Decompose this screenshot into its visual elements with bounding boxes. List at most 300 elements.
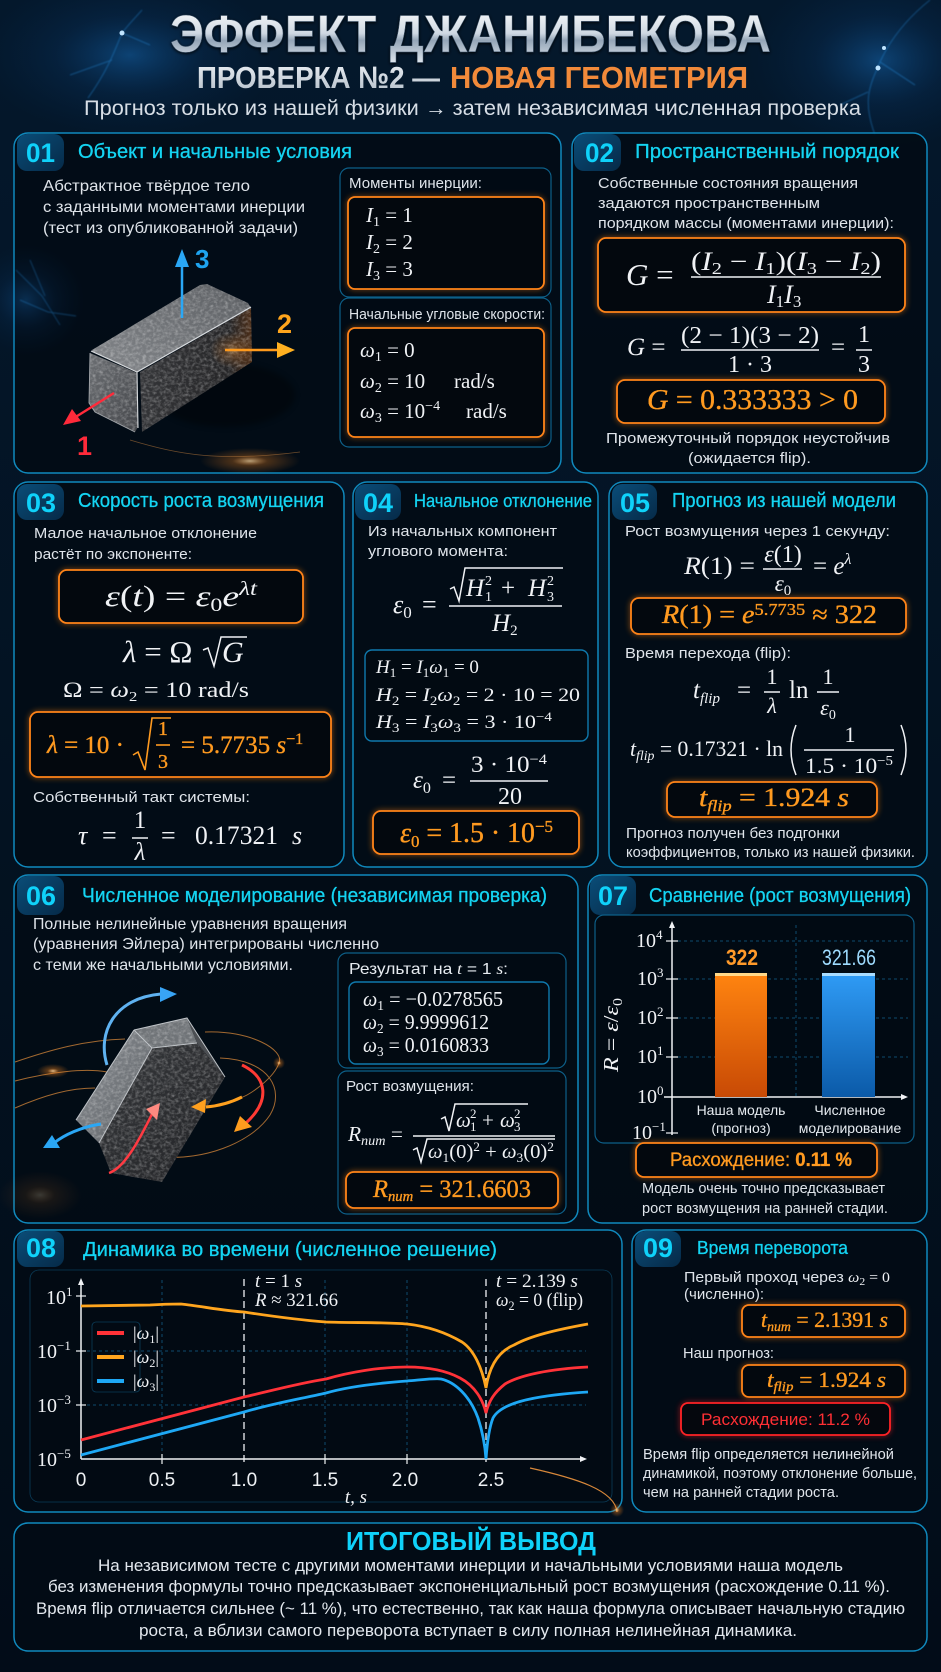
subpanel: perturbation growth: (0) [449, 1141, 473, 1163]
formula: G calculation: 1 [858, 322, 870, 348]
annotation: flip: = 0 (flip) [515, 1290, 583, 1311]
box: angular momentum components: 1 [390, 665, 396, 680]
annotation: flip: t = 2.139 s [496, 1271, 578, 1292]
result: predicted flip time: t [767, 1367, 774, 1392]
x axis labels: (прогноз) [711, 1120, 771, 1136]
formula: R(1): = e [813, 553, 844, 580]
subpanel: result at t=1: 2 [377, 1022, 384, 1037]
label: first pass: Первый проход через ω [684, 1269, 859, 1286]
formula: G calculation: 1 · 3 [728, 352, 772, 378]
y axis labels: 10 [632, 1122, 652, 1144]
subpanel: perturbation growth: 2 [470, 1106, 476, 1121]
box: angular momentum components: = 0 [449, 657, 479, 678]
x axis title: t, s [345, 1487, 367, 1508]
formula: t flip: λ [766, 693, 777, 718]
formula: tau: τ [78, 821, 89, 850]
y axis title: 0 [611, 998, 626, 1006]
badge 08: 08 [26, 1233, 56, 1263]
bar: numerical [822, 945, 876, 1097]
formula: epsilon0 calculation [413, 752, 548, 810]
note 02: (ожидается flip). [688, 450, 811, 467]
heading 09: Время переворота [697, 1238, 849, 1258]
badge 01: 01 [26, 138, 55, 168]
description 02: Собственные состояния вращения [598, 175, 858, 192]
label: first pass: (численно): [684, 1286, 764, 1303]
conclusion heading: ИТОГОВЫЙ ВЫВОД [346, 1526, 596, 1556]
result: numerical flip time: = 2.1391 [791, 1307, 880, 1332]
formula: t flip calculation: = 0.17321 · ln [654, 736, 783, 761]
subpanel: perturbation growth: + [480, 1141, 502, 1163]
box: angular momentum components: 1 [443, 665, 449, 680]
result: lambda value: 3 [158, 751, 168, 773]
y axis labels: 10 [637, 1086, 657, 1108]
panel 03: perturbation growth rate [14, 482, 344, 867]
description 02: задаются пространственным [598, 195, 820, 212]
note 05: Прогноз получен без подгонки [626, 826, 840, 842]
tagline: Прогноз только из нашей физики → затем независимая численная проверка [84, 97, 861, 120]
x tick labels: 2.0 [392, 1470, 418, 1491]
x tick labels: 2.5 [478, 1470, 504, 1491]
heading 06: Численное моделирование (независимая проверка) [82, 885, 547, 907]
result: t flip value: s [837, 783, 849, 812]
subpanel: moments of inertia: Моменты инерции: [349, 175, 482, 192]
box: angular momentum components: H [375, 685, 393, 706]
result: predicted flip time: s [877, 1367, 886, 1392]
subpanel: moments of inertia: I [365, 257, 374, 281]
formula: epsilon0 from H: 2 [547, 574, 554, 589]
subpanel: initial angular velocities: Начальные угловые скорости: [349, 306, 545, 323]
subpanel: moments of inertia: = 2 [380, 230, 413, 254]
label: flip time: Время перехода (flip): [625, 645, 791, 662]
formula: tau: = [161, 821, 176, 850]
formula: epsilon0 calculation: −4 [530, 752, 548, 768]
formula: tau [78, 807, 302, 866]
note 07: Модель очень точно предсказывает [642, 1180, 885, 1197]
subpanel: initial angular velocities: 3 [375, 411, 382, 426]
description 01 [43, 178, 305, 237]
subpanel: perturbation growth: ω [428, 1141, 443, 1163]
formula: tau: 1 [134, 807, 146, 834]
subpanel: perturbation growth: ω [502, 1141, 517, 1163]
description 06: Полные нелинейные уравнения вращения [33, 916, 347, 933]
legend: |ω [133, 1323, 149, 1343]
formula: t flip calculation: 1 [844, 722, 856, 747]
subpanel: moments of inertia: 3 [373, 269, 380, 284]
subpanel: result at t=1: ω [363, 987, 377, 1011]
formula: R(1): λ [843, 551, 851, 568]
formula: epsilon0 from H: + [501, 575, 515, 602]
result: discrepancy [636, 1143, 877, 1177]
result: R(1) value [631, 598, 906, 634]
title: ЭФФЕКТ ДЖАНИБЕКОВА [170, 5, 771, 64]
badge 07 [590, 876, 636, 915]
subtitle: НОВАЯ ГЕОМЕТРИЯ [450, 60, 748, 95]
subpanel: result at t=1: = −0.0278565 [384, 987, 503, 1011]
note 09: динамикой, поэтому отклонение больше, [643, 1466, 917, 1482]
subpanel: perturbation growth: R [372, 1176, 388, 1203]
box: angular momentum components: −4 [536, 709, 553, 724]
arrow: blue arc [104, 987, 177, 1065]
y tick labels: −5 [57, 1446, 71, 1461]
result: epsilon0 value: = 1.5 · 10 [419, 818, 535, 849]
box: angular momentum components: I [422, 712, 432, 733]
subpanel: perturbation growth: (0) [523, 1141, 547, 1163]
arrow: red on face [109, 1103, 160, 1173]
subpanel: initial angular velocities: ω [360, 399, 375, 423]
formula: t flip calculation: −5 [877, 754, 893, 769]
description 01: с заданными моментами инерции [43, 199, 305, 216]
arrow: red arc [234, 1065, 263, 1132]
legend: |ω [133, 1347, 149, 1367]
y tick labels [37, 1284, 72, 1471]
heading 07: Сравнение (рост возмущения) [649, 885, 911, 907]
panel 08: dynamics over time [14, 1230, 624, 1517]
heading 03: Скорость роста возмущения [78, 490, 324, 512]
formula: tau: = [102, 821, 117, 850]
subpanel: result at t=1: ω [363, 1010, 377, 1034]
arrow: axis 2 [225, 309, 295, 358]
subpanel: perturbation growth: Рост возмущения: [346, 1078, 474, 1095]
subpanel: perturbation growth: 2 [473, 1139, 480, 1154]
box: angular momentum components: 3 [430, 720, 438, 735]
y axis title: R = ε/ε [599, 1007, 623, 1072]
formula: t flip: ln [789, 677, 809, 704]
note 09 [643, 1447, 917, 1501]
formula: epsilon0 from H: 2 [510, 623, 518, 639]
subpanel: perturbation growth: 1 [443, 1150, 449, 1165]
annotation: flip: ω [496, 1290, 508, 1311]
result: predicted flip time [742, 1365, 905, 1397]
arrow: axis 1: 1 [77, 431, 92, 461]
badge 09: 09 [643, 1233, 673, 1263]
y tick labels: 10 [37, 1449, 57, 1471]
subpanel: result at t=1 [338, 953, 566, 1068]
formula: epsilon0 from H: ε [393, 590, 404, 619]
formula: epsilon0 from H: = [422, 590, 437, 619]
bar: our model [715, 945, 767, 1097]
badge 01 [17, 134, 64, 171]
result: t flip value: t [699, 783, 708, 812]
subpanel: initial angular velocities: −4 [425, 399, 440, 414]
bar: our model: 322 [726, 945, 758, 970]
result: numerical flip time: t [761, 1307, 768, 1332]
x tick labels [76, 1470, 504, 1491]
formula: epsilon0 calculation: = [442, 767, 456, 794]
y axis labels: 4 [656, 927, 663, 942]
badge 03: 03 [26, 488, 56, 518]
result: discrepancy: Расхождение: 0.11 % [670, 1150, 852, 1171]
formula: epsilon0 from H: H [491, 610, 512, 637]
panel 02: spatial order [572, 133, 927, 473]
formula: epsilon of t: ε(t) = ε [105, 580, 207, 613]
subtitle: ПРОВЕРКА №2 — [197, 60, 440, 95]
panel 06: numerical simulation [0, 875, 578, 1223]
subpanel: result at t=1: ω [363, 1033, 377, 1057]
legend: | [155, 1371, 159, 1391]
legend: 2 [149, 1356, 155, 1370]
box: angular momentum components: 3 [392, 720, 399, 735]
formula: omega: 2 [129, 690, 137, 705]
formula: t flip calculation: t [630, 736, 637, 761]
box: angular momentum components: 2 [392, 693, 399, 708]
flip and t=1 markers [244, 1279, 486, 1462]
formula: epsilon0 calculation: 20 [498, 784, 522, 810]
box: angular momentum components: ω [429, 657, 443, 678]
formula: G: 3 [793, 292, 801, 311]
annotation: flip [496, 1271, 583, 1313]
legend: 3 [149, 1380, 155, 1394]
description 06: (уравнения Эйлера) интегрированы численно [33, 936, 379, 953]
description 04: Из начальных компонент [368, 523, 557, 540]
formula: epsilon0 from H: H [465, 575, 486, 602]
heading 02: Пространственный порядок [635, 141, 899, 163]
result: predicted flip time: = 1.924 [793, 1367, 877, 1392]
x tick labels: 1.0 [231, 1470, 257, 1491]
formula: R(1) [683, 542, 851, 599]
label: first pass: 2 [859, 1276, 865, 1288]
subpanel: moments of inertia: 1 [373, 215, 380, 230]
formula: epsilon0 calculation: 0 [423, 780, 431, 797]
formula: G: I [783, 280, 794, 309]
description 02 [598, 175, 894, 232]
formula: t flip: ε [820, 695, 829, 720]
x tick labels: 1.5 [312, 1470, 338, 1491]
subpanel: perturbation growth: 2 [514, 1106, 520, 1121]
badge 04: 04 [363, 488, 393, 518]
description 02: порядком массы (моментами инерции): [598, 215, 894, 232]
box: angular momentum components: = 3 · 10 [461, 712, 536, 733]
annotation: t=1 [254, 1271, 338, 1311]
formula: t flip: 1 [766, 664, 778, 689]
label: our forecast: Наш прогноз: [683, 1345, 774, 1362]
legend: | [155, 1347, 159, 1367]
formula: epsilon0 calculation: 3 · 10 [471, 752, 525, 777]
formula: epsilon of t: λt [238, 578, 258, 600]
panel 04: initial deviation [353, 482, 598, 867]
description 04: углового момента: [368, 543, 508, 560]
annotation: t=1: t = 1 s [255, 1271, 302, 1292]
subpanel: result at t=1: = 0.0160833 [384, 1033, 489, 1057]
subpanel: perturbation growth: num [361, 1134, 386, 1149]
subpanel: perturbation growth: R [347, 1122, 361, 1146]
formula: G: (I [691, 247, 710, 276]
formula: G: ) [871, 247, 881, 276]
y tick labels: 1 [66, 1284, 72, 1299]
formula: G [598, 238, 905, 312]
x tick labels: 0.5 [149, 1470, 175, 1491]
badge 09 [635, 1231, 681, 1267]
box: angular momentum components: 2 [430, 693, 437, 708]
subpanel: initial angular velocities: rad/s [454, 369, 495, 393]
result: flip discrepancy: Расхождение: 11.2 % [701, 1410, 870, 1429]
label: own time: Собственный такт системы: [33, 789, 250, 806]
y tick labels: −3 [57, 1392, 71, 1407]
formula: G: G = [626, 257, 674, 292]
y axis labels: 1 [657, 1043, 664, 1058]
result: t flip value: flip [707, 798, 732, 815]
subpanel: initial angular velocities: 1 [375, 350, 382, 365]
formula: G: − [817, 247, 850, 276]
formula: G: 1 [765, 259, 776, 278]
result: R(1) value: R(1) = e [662, 600, 754, 629]
note 07: рост возмущения на ранней стадии. [642, 1200, 888, 1217]
formula: t flip calculation: 1.5 · 10 [805, 753, 873, 778]
formula: G: 2 [860, 259, 871, 278]
arrow: axis 1 [63, 393, 114, 461]
result: numerical flip time: num [767, 1320, 791, 1335]
formula: epsilon0 calculation: ε [413, 767, 423, 794]
result: predicted flip time: flip [774, 1380, 793, 1395]
formula: G: )( [776, 247, 796, 276]
conclusion text: без изменения формулы точно предсказывает экспоненциальный рост возмущения (расхождение 0.11 %). [48, 1577, 890, 1596]
badge 04 [355, 484, 401, 520]
result: epsilon0 value: ε [400, 818, 411, 849]
subpanel: moments of inertia: I [365, 203, 374, 227]
result: G value: G = 0.333333 > 0 [647, 385, 858, 416]
result: lambda value: λ = 10 · [46, 732, 124, 759]
result: epsilon0 value: 0 [411, 832, 419, 851]
panel 01: object and initial conditions [0, 133, 561, 474]
subpanel: moments of inertia: I [365, 230, 374, 254]
subpanel: initial angular velocities: rad/s [466, 399, 507, 423]
formula: R(1): 0 [784, 583, 791, 599]
formula: t flip: t [693, 677, 701, 704]
result: lambda value: = 5.7735 s [181, 732, 286, 759]
result: lambda value: −1 [286, 731, 303, 748]
description 03 [34, 525, 257, 563]
box: angular momentum components: H [375, 712, 393, 733]
description 01: (тест из опубликованной задачи) [43, 220, 298, 237]
conclusion text: На независимом тесте с другими моментами инерции и начальными условиями наша модель [98, 1556, 843, 1575]
box: angular momentum components: 1 [423, 665, 429, 680]
badge 06: 06 [26, 881, 56, 911]
x axis labels: моделирование [799, 1120, 901, 1136]
decorative flare [530, 1468, 624, 1517]
formula: G calculation [627, 322, 872, 378]
formula: epsilon0 from H: 2 [485, 574, 492, 589]
y tick labels: −1 [57, 1338, 71, 1353]
formula: G: 1 [776, 292, 784, 311]
formula: epsilon0 from H: H [527, 575, 548, 602]
subpanel: perturbation growth: = [386, 1122, 403, 1146]
box: angular momentum components: 3 [453, 720, 461, 735]
formula: lambda: λ = Ω [122, 634, 192, 669]
badge 07: 07 [598, 881, 628, 911]
box: angular momentum components: = [399, 712, 423, 733]
subpanel: perturbation growth: + [482, 1108, 494, 1132]
box: angular momentum components: I [415, 657, 424, 678]
note 02 [606, 430, 890, 467]
arrow: axis 2: 2 [277, 309, 292, 339]
result: t flip value: = 1.924 [732, 783, 837, 812]
arrow: blue lower left [43, 1124, 101, 1148]
subpanel: initial angular velocities: = 0 [382, 338, 415, 362]
formula: tau: λ [134, 839, 146, 866]
formula: tau: 0.17321 [195, 821, 278, 850]
legend: 1 [149, 1332, 155, 1346]
subpanel: perturbation growth: 1 [470, 1119, 476, 1134]
y axis labels [632, 927, 666, 1144]
heading 04: Начальное отклонение [414, 491, 592, 511]
result: t flip value [667, 782, 877, 817]
annotation: flip: 2 [508, 1298, 515, 1313]
formula: epsilon0 from H: 0 [403, 603, 412, 622]
panel 09: flip time [632, 1230, 927, 1512]
conclusion text [36, 1556, 905, 1640]
y tick labels: 10 [37, 1341, 57, 1363]
formula: omega: = 10 rad/s [137, 677, 249, 702]
x tick labels: 0 [76, 1470, 86, 1491]
icon: rotating block with arrows [15, 987, 285, 1182]
subpanel: perturbation growth: num [388, 1189, 413, 1205]
formula: R(1): ε(1) [764, 542, 802, 568]
description 01: Абстрактное твёрдое тело [43, 178, 250, 195]
formula: epsilon0 from H [393, 568, 563, 639]
formula: G: − [722, 247, 755, 276]
y axis labels: 2 [657, 1004, 664, 1019]
conclusion text: Время flip отличается сильнее (~ 11 %), что естественно, так как наша формула описывает начальную стадию [36, 1599, 905, 1618]
curve: omega 2 [81, 1304, 588, 1388]
formula: G: 3 [807, 259, 817, 278]
panel: final conclusion [14, 1523, 927, 1651]
subpanel: result at t=1: 3 [377, 1045, 384, 1060]
y axis labels: 10 [636, 930, 656, 952]
subtitle [197, 60, 748, 95]
y axis labels: 0 [657, 1083, 664, 1098]
subpanel: result at t=1: = 9.9999612 [384, 1010, 489, 1034]
box: angular momentum components: 2 [453, 693, 460, 708]
y axis labels: −1 [652, 1119, 666, 1134]
axes [76, 1278, 587, 1464]
subpanel: initial angular velocities [340, 298, 551, 447]
subpanel: moments of inertia: 2 [373, 242, 380, 257]
badge 02: 02 [585, 138, 614, 168]
result: epsilon0 value: −5 [535, 817, 553, 836]
subpanel: perturbation growth: ω [500, 1108, 515, 1132]
subpanel: initial angular velocities: ω [360, 338, 375, 362]
result: epsilon0 value [373, 811, 579, 854]
box: angular momentum components: H [375, 657, 391, 678]
label: first pass [684, 1269, 890, 1303]
description 03: растёт по экспоненте: [34, 546, 192, 563]
formula: G calculation: = [831, 334, 845, 361]
result: flip discrepancy [681, 1403, 890, 1435]
y tick labels: 10 [46, 1287, 66, 1309]
badge 05 [612, 484, 657, 520]
formula: t flip: 0 [829, 708, 836, 723]
formula: t flip: flip [700, 691, 720, 707]
formula: R(1): ε [775, 571, 785, 596]
heading 01: Объект и начальные условия [78, 141, 352, 163]
y axis labels: 10 [637, 968, 657, 990]
formula: epsilon of t: e [222, 580, 239, 613]
subpanel: result at t=1: Результат на t = 1 s: [349, 961, 508, 978]
annotation: t=1: R ≈ 321.66 [254, 1290, 338, 1311]
result: G value [617, 380, 885, 423]
panel 05: prediction from our model [609, 482, 927, 867]
box: angular momentum components: ω [437, 685, 453, 706]
x axis labels: Наша модель [697, 1102, 785, 1118]
description 06: с теми же начальными условиями. [33, 957, 293, 974]
subpanel: perturbation growth: ω [456, 1108, 471, 1132]
formula: omega: Ω = ω [63, 677, 126, 702]
heading 05: Прогноз из нашей модели [672, 490, 896, 512]
formula: t flip calculation: flip [636, 749, 654, 764]
formula: G: 2 [712, 259, 722, 278]
badge 02 [574, 134, 621, 171]
note 05 [626, 826, 915, 861]
legend [92, 1322, 159, 1394]
